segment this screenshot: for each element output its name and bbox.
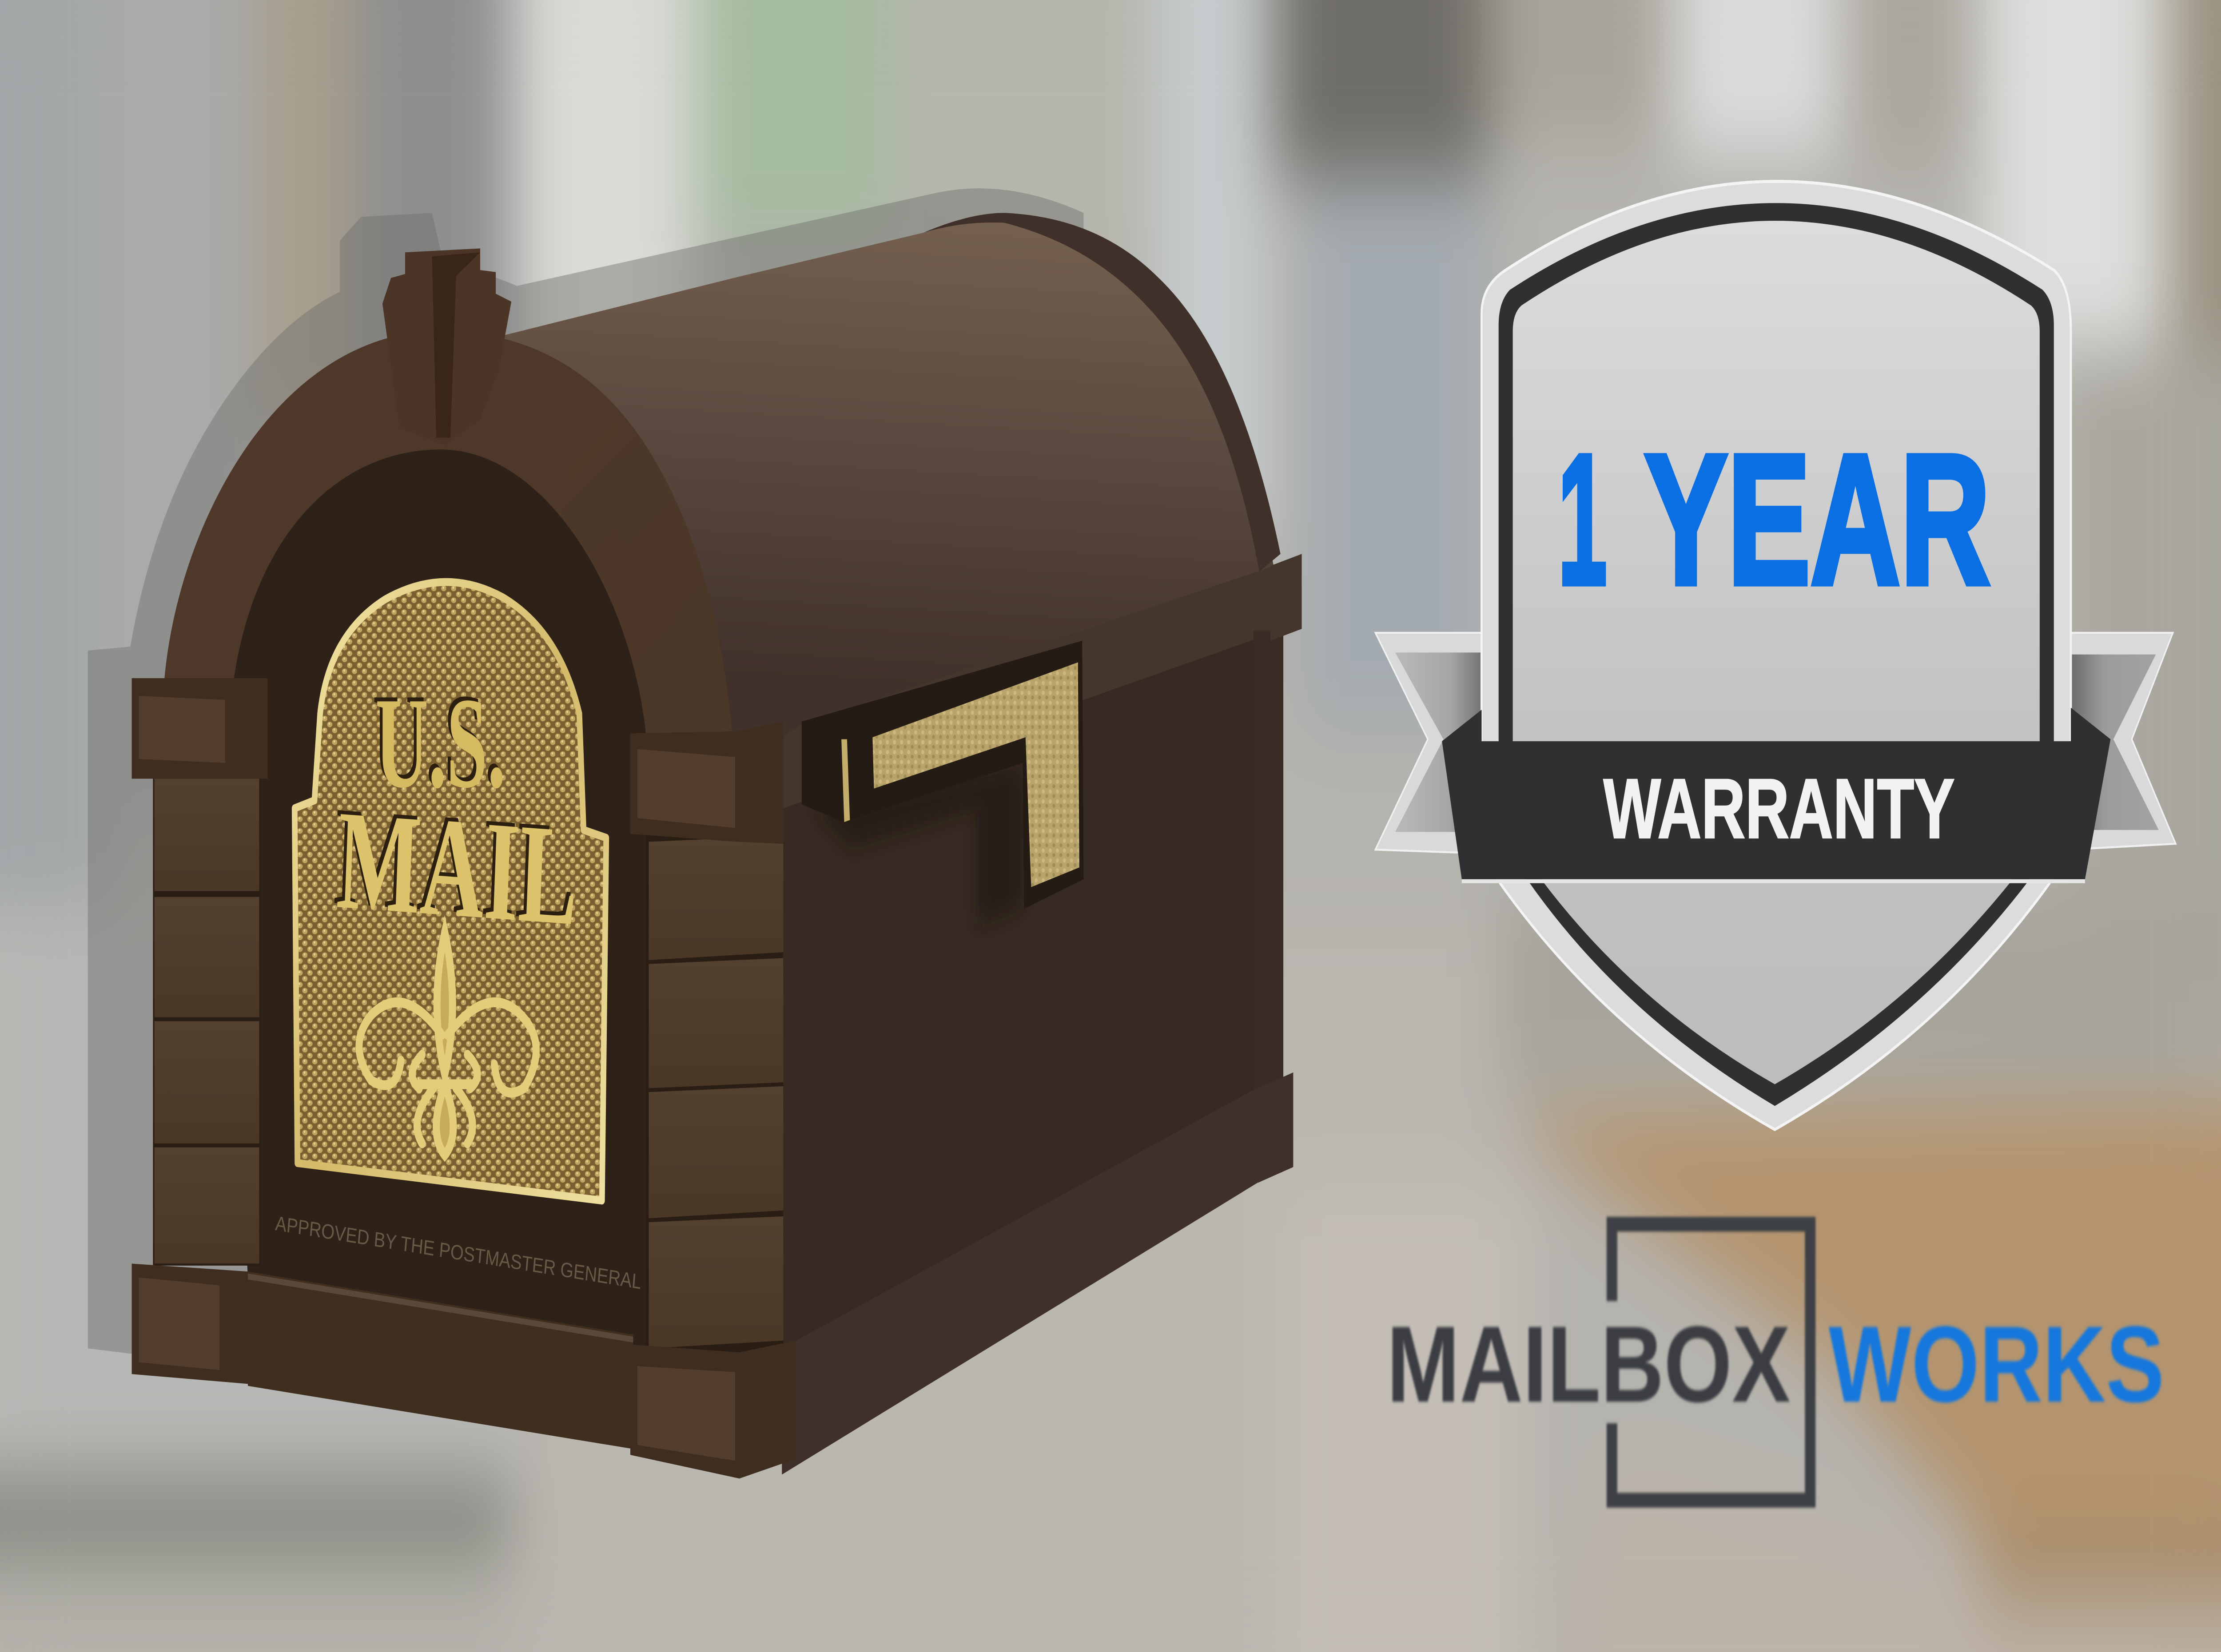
- left ribbon tail: [1375, 633, 1487, 854]
- right top block: [630, 722, 783, 844]
- front arch: [164, 331, 732, 733]
- right ribbon tail: [2068, 633, 2176, 850]
- left pillar bricks: [155, 778, 259, 1263]
- bottom right tab: [1254, 1072, 1293, 1183]
- plate lettering MAIL: MAIL: [332, 777, 578, 952]
- front recess: [227, 444, 659, 1360]
- 1 YEAR heading: YEAR: [1644, 416, 1990, 623]
- mailbox body roof: [489, 217, 1275, 789]
- approved engraving: APPROVED BY THE POSTMASTER GENERAL: [275, 1211, 642, 1294]
- right bottom block: [630, 1341, 796, 1478]
- logo word MAILBOX: MAILBOX: [1387, 1304, 1791, 1425]
- pillar backing: [153, 778, 783, 1360]
- keystone facets: [432, 252, 480, 437]
- mailbox side panel: [776, 582, 1275, 1380]
- sill line: [248, 1274, 633, 1342]
- shield inner panel: [1513, 221, 2040, 1084]
- fleur de lis: [359, 933, 536, 1155]
- logo word WORKS: WORKS: [1829, 1304, 2164, 1425]
- bottom strap band: [782, 1088, 1261, 1474]
- top right tab: [1270, 554, 1302, 641]
- flag holder highlight: [841, 739, 850, 822]
- brass door plate: [295, 582, 606, 1200]
- WARRANTY label: WARRANTY: [1604, 762, 1955, 856]
- plate lettering MAIL highlight: MAIL: [334, 781, 581, 955]
- mailbox illustration: [132, 213, 1302, 1478]
- shield dark line: [1499, 203, 2054, 1106]
- brass mailbox flag: [872, 663, 1079, 887]
- mailbox cut-out shadow: [88, 188, 1083, 1360]
- right end column: [1254, 631, 1283, 1096]
- flag shadow: [815, 765, 1023, 926]
- flag holder: [802, 641, 1083, 909]
- logo square frame: [1612, 1224, 1810, 1500]
- plate lettering US: U.S.: [373, 667, 503, 811]
- roof edge ridge: [923, 213, 1281, 572]
- band highlight: [1462, 879, 2085, 883]
- bottom sill: [248, 1271, 633, 1449]
- 1 YEAR heading: 1: [1558, 416, 1607, 623]
- plate face: [295, 582, 606, 1200]
- plate lettering US highlight: U.S.: [375, 671, 505, 815]
- warranty badge: [1375, 181, 2176, 1130]
- left bottom block: [132, 1263, 248, 1384]
- arch keystone: [382, 248, 511, 445]
- Mailbox Works logo: [1387, 1224, 2164, 1500]
- left top block: [132, 678, 268, 778]
- ribbon band: [1442, 708, 2110, 879]
- shield outer border: [1481, 181, 2071, 1130]
- right pillar bricks: [649, 836, 783, 1348]
- top strap band: [783, 566, 1275, 808]
